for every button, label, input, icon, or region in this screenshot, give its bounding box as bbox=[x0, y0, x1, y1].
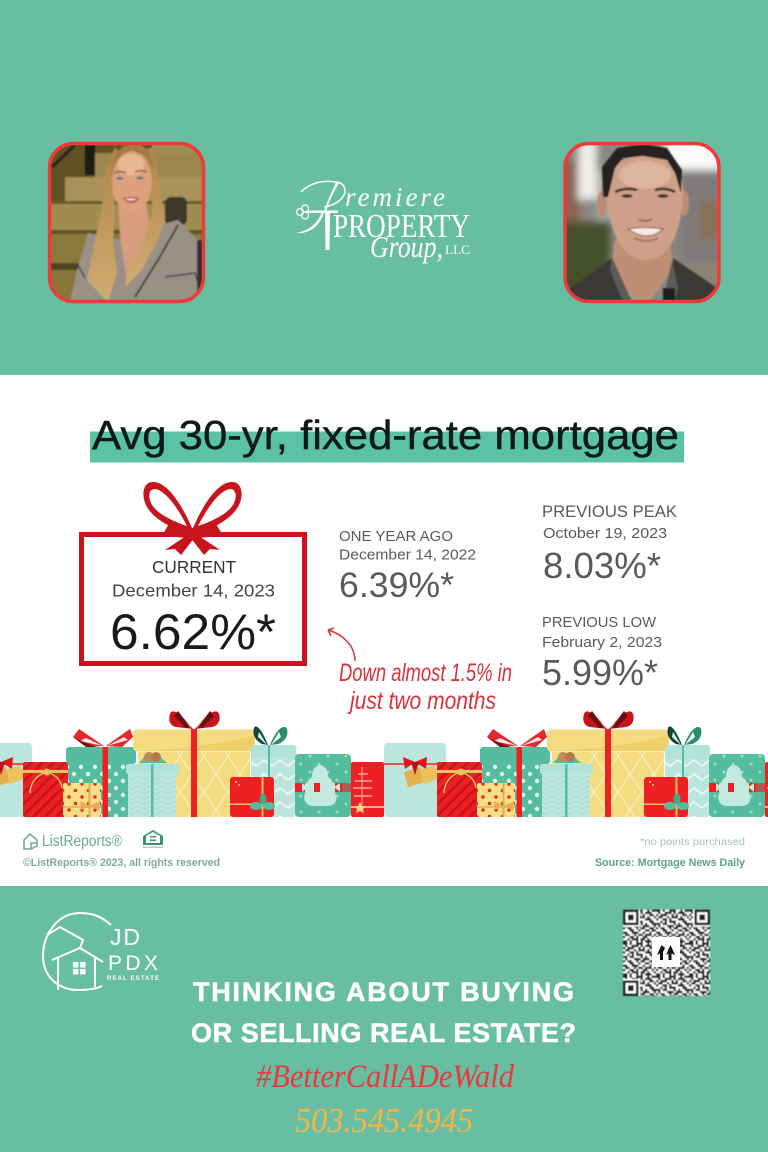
no points note: *no points purchased bbox=[640, 836, 745, 848]
ListReports wordmark: ListReports® bbox=[42, 833, 122, 850]
logo wordmark: Property: PROPERTY bbox=[333, 208, 470, 245]
logo wordmark: Group: Group, bbox=[370, 229, 443, 264]
gift box outline bbox=[82, 534, 304, 664]
phone number: 503.545.4945 bbox=[295, 1101, 473, 1140]
call to action bbox=[191, 977, 576, 1048]
callout text bbox=[339, 659, 512, 715]
callout line two: just two months bbox=[347, 687, 496, 715]
mint gift with bells bbox=[0, 743, 32, 817]
small yellow dotted gift bbox=[63, 783, 101, 817]
footer: notes bbox=[595, 836, 746, 869]
photo: woman agent bbox=[49, 144, 204, 302]
callout arrow bbox=[328, 628, 355, 661]
stat: previous peak bbox=[542, 503, 677, 586]
red striped gift bbox=[23, 762, 69, 817]
QR finder top right bbox=[693, 910, 710, 927]
ribbon bow bbox=[143, 482, 242, 555]
logo: JD PDX Real Estate bbox=[43, 913, 159, 990]
one year ago rate: 6.39%* bbox=[339, 566, 454, 605]
previous peak date: October 19, 2023 bbox=[543, 525, 667, 542]
pale mint scalloped gift bbox=[126, 752, 179, 817]
one year ago date: December 14, 2022 bbox=[339, 546, 476, 564]
previous low label: PREVIOUS LOW bbox=[542, 614, 657, 631]
logo wordmark: Premiere: remiere bbox=[345, 182, 445, 212]
call to action line two: OR SELLING REAL ESTATE? bbox=[191, 1018, 576, 1048]
logo script P and key mark bbox=[296, 181, 345, 250]
logo window bbox=[73, 962, 86, 974]
logo house ring bbox=[43, 913, 111, 990]
logo wordmark: LLC: LLC bbox=[445, 243, 470, 257]
icon: equal housing bbox=[143, 830, 163, 848]
teal dotted gift bbox=[66, 729, 136, 817]
hashtag: #BetterCallADeWald bbox=[256, 1059, 514, 1095]
current date: December 14, 2023 bbox=[112, 580, 275, 600]
white report panel bbox=[0, 375, 768, 886]
logo JD: JD bbox=[110, 924, 140, 950]
stat: one year ago bbox=[339, 528, 476, 605]
callout line one: Down almost 1.5% in bbox=[339, 659, 512, 687]
photo: man agent bbox=[560, 140, 723, 302]
illustration: row of gift boxes bbox=[0, 711, 768, 817]
icon: ListReports house bbox=[24, 834, 37, 849]
logo real estate: REAL ESTATE bbox=[107, 976, 159, 982]
stat: previous low bbox=[542, 614, 662, 693]
red tree gift bbox=[351, 762, 384, 817]
title: Avg 30-yr, fixed-rate mortgage bbox=[92, 412, 679, 458]
green tree gift bbox=[295, 754, 351, 817]
one year ago label: ONE YEAR AGO bbox=[339, 528, 453, 545]
QR finder top left bbox=[623, 910, 640, 927]
logo house bbox=[47, 927, 103, 990]
current rate: 6.62%* bbox=[110, 604, 276, 660]
previous low date: February 2, 2023 bbox=[542, 634, 662, 651]
panel: current rate gift box bbox=[82, 482, 304, 664]
logo: Premiere Property Group bbox=[296, 181, 470, 264]
previous low rate: 5.99%* bbox=[542, 652, 658, 693]
current label: CURRENT bbox=[152, 557, 236, 577]
QR center badge bbox=[652, 937, 680, 967]
copyright line: ©ListReports® 2023, all rights reserved bbox=[23, 857, 220, 869]
heading highlight bar bbox=[90, 432, 684, 462]
QR code bbox=[623, 910, 710, 996]
logo PDX: PDX bbox=[108, 952, 158, 975]
call to action line one: THINKING ABOUT BUYING bbox=[193, 977, 574, 1007]
mint chevron gift bbox=[251, 726, 296, 817]
previous peak rate: 8.03%* bbox=[543, 545, 661, 586]
previous peak label: PREVIOUS PEAK bbox=[542, 503, 677, 521]
yellow diamond gift bbox=[133, 711, 255, 817]
footer: brand bbox=[23, 830, 220, 869]
source note: Source: Mortgage News Daily bbox=[595, 857, 746, 869]
QR finder bottom left bbox=[623, 979, 640, 996]
repeated gift group bbox=[384, 711, 768, 817]
small red gift with holly bbox=[230, 777, 275, 817]
